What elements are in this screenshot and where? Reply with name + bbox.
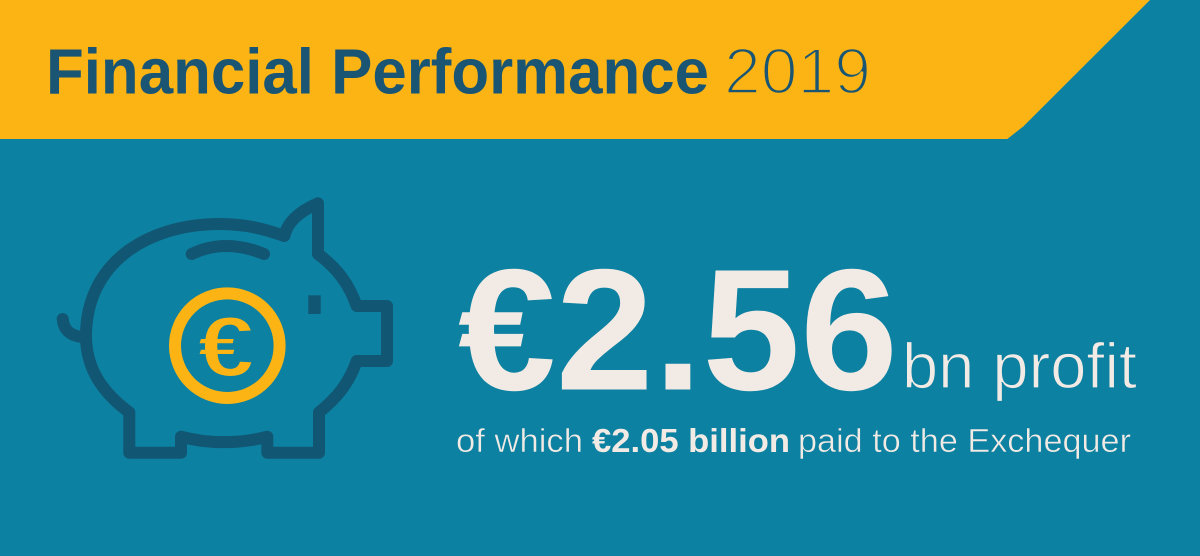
headline figure: €2.56 [458,232,898,426]
euro symbol: € [198,300,254,395]
subtitle [456,422,1131,459]
subtitle: of which [456,422,583,459]
header banner [0,0,1150,139]
subtitle: €2.05 billion [592,422,790,459]
pig eye [308,295,321,314]
title: Financial Performance [46,36,709,108]
subtitle: paid to the Exchequer [798,422,1131,459]
profit label: bn profit [902,330,1137,402]
icon: piggy bank [63,203,387,453]
title: 2019 [724,35,871,108]
pig outline [63,203,387,453]
coin [175,293,280,398]
